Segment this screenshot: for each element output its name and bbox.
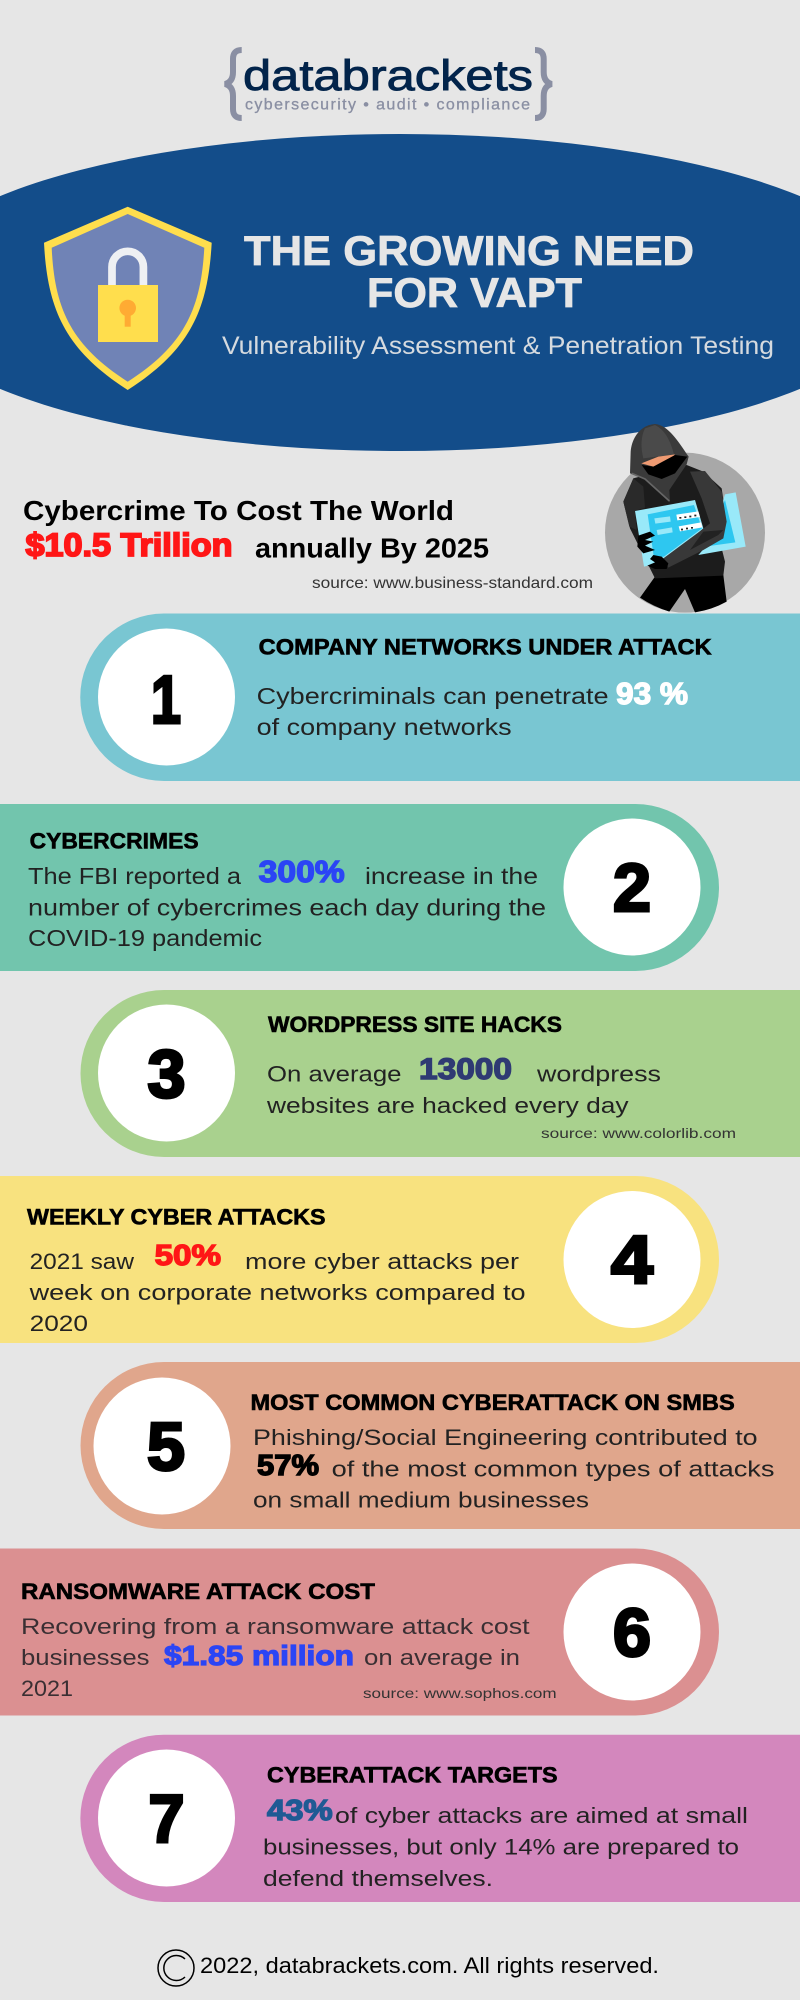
- panel 4: weekly attacks: WEEKLY CYBER ATTACKS: [27, 1204, 326, 1230]
- panel 5: most common attack: MOST COMMON CYBERATTACK ON SMBS: [250, 1390, 735, 1415]
- panel 2: cybercrimes: number of cybercrimes each day during the: [28, 894, 546, 920]
- panel 3: wordpress hacks: websites are hacked every day: [266, 1093, 629, 1118]
- panel 5: most common attack: [81, 1362, 800, 1529]
- panel 6: ransomware cost: source: www.sophos.com: [363, 1685, 557, 1701]
- panel 7: attack targets: of cyber attacks are aimed at small: [335, 1803, 748, 1828]
- panel 1: company networks: COMPANY NETWORKS UNDER ATTACK: [259, 634, 712, 660]
- panel 2: cybercrimes: increase in the: [365, 863, 538, 889]
- panel 3: wordpress hacks: 3: [148, 1036, 186, 1112]
- panel 3: wordpress hacks: source: www.colorlib.com: [541, 1125, 736, 1141]
- panel 6: ransomware cost: on average in: [364, 1645, 520, 1670]
- panel 7: attack targets: CYBERATTACK TARGETS: [267, 1762, 558, 1788]
- panel 1: company networks: of company networks: [257, 714, 512, 740]
- icon: shield with padlock: [44, 207, 212, 390]
- panel 4: weekly attacks: [0, 1176, 719, 1343]
- panel 5: most common attack: 5: [147, 1409, 185, 1485]
- panel 4: weekly attacks: 2021 saw: [30, 1249, 134, 1274]
- panel 7: attack targets: 43%: [267, 1795, 333, 1827]
- logo: databrackets: [225, 50, 552, 118]
- panel 2: cybercrimes: 2: [613, 850, 651, 926]
- panel 3: wordpress hacks: 13000: [419, 1053, 512, 1086]
- headline: cybercrime cost: annually By 2025: [255, 532, 489, 564]
- panel 6: ransomware cost: businesses: [21, 1645, 150, 1670]
- subtitle: Vulnerability Assessment & Penetration Testing: [222, 332, 774, 360]
- panel 6: ransomware cost: Recovering from a ransomware attack cost: [21, 1614, 530, 1639]
- panel 7: attack targets: businesses, but only 14% are prepared to: [263, 1835, 739, 1860]
- panel 6: ransomware cost: 2021: [21, 1676, 73, 1701]
- panel 1: company networks: [80, 614, 800, 781]
- headline: cybercrime cost: [23, 495, 593, 592]
- title: THE GROWING NEED: [244, 227, 694, 274]
- panel 6: ransomware cost: 6: [613, 1595, 651, 1671]
- header banner ellipse: [0, 134, 800, 451]
- panel 4: weekly attacks: week on corporate networks compared to: [28, 1280, 525, 1305]
- title: FOR VAPT: [367, 269, 582, 316]
- panel 5: most common attack: 57%: [257, 1450, 319, 1482]
- panel 3: wordpress hacks: [81, 990, 800, 1157]
- panel 7: attack targets: [80, 1735, 800, 1902]
- panel 1: company networks: 1: [151, 662, 181, 738]
- panel 3: wordpress hacks: WORDPRESS SITE HACKS: [268, 1012, 562, 1037]
- panel 4: weekly attacks: more cyber attacks per: [245, 1249, 519, 1274]
- headline: cybercrime cost: Cybercrime To Cost The World: [23, 495, 454, 526]
- panel 6: ransomware cost: $1.85 million: [164, 1640, 354, 1671]
- panel 2: cybercrimes: COVID-19 pandemic: [28, 925, 262, 951]
- footer: copyright: 2022, databrackets.com. All rights reserved.: [200, 1953, 659, 1978]
- logo: databrackets: databrackets: [243, 52, 533, 100]
- panel 7: attack targets: defend themselves.: [263, 1866, 493, 1891]
- panel 1: company networks: 93 %: [616, 676, 688, 711]
- panel 3: wordpress hacks: wordpress: [536, 1062, 661, 1087]
- title: [244, 227, 694, 316]
- panel 4: weekly attacks: 50%: [155, 1240, 221, 1272]
- panel 2: cybercrimes: [0, 804, 719, 971]
- panel 7: attack targets: 7: [148, 1781, 184, 1857]
- footer: copyright: [158, 1950, 659, 1986]
- headline: cybercrime cost: $10.5 Trillion: [26, 527, 232, 563]
- panel 4: weekly attacks: 4: [611, 1222, 653, 1298]
- panel 2: cybercrimes: The FBI reported a: [28, 863, 241, 889]
- panel 5: most common attack: Phishing/Social Engineering contributed to: [253, 1425, 758, 1450]
- logo: databrackets: cybersecurity • audit • compliance: [245, 96, 530, 114]
- panel 1: company networks: Cybercriminals can penetrate: [257, 683, 609, 709]
- panel 5: most common attack: of the most common types of attacks: [332, 1456, 774, 1481]
- panel 6: ransomware cost: [0, 1548, 719, 1716]
- panel 3: wordpress hacks: On average: [267, 1062, 402, 1087]
- panel 6: ransomware cost: RANSOMWARE ATTACK COST: [21, 1579, 376, 1604]
- panel 2: cybercrimes: 300%: [259, 854, 345, 889]
- hacker illustration: [605, 424, 765, 613]
- headline: cybercrime cost: source: www.business-standard.com: [312, 575, 593, 592]
- panel 4: weekly attacks: 2020: [30, 1311, 88, 1336]
- panel 2: cybercrimes: CYBERCRIMES: [30, 828, 199, 854]
- panel 5: most common attack: on small medium businesses: [253, 1488, 589, 1513]
